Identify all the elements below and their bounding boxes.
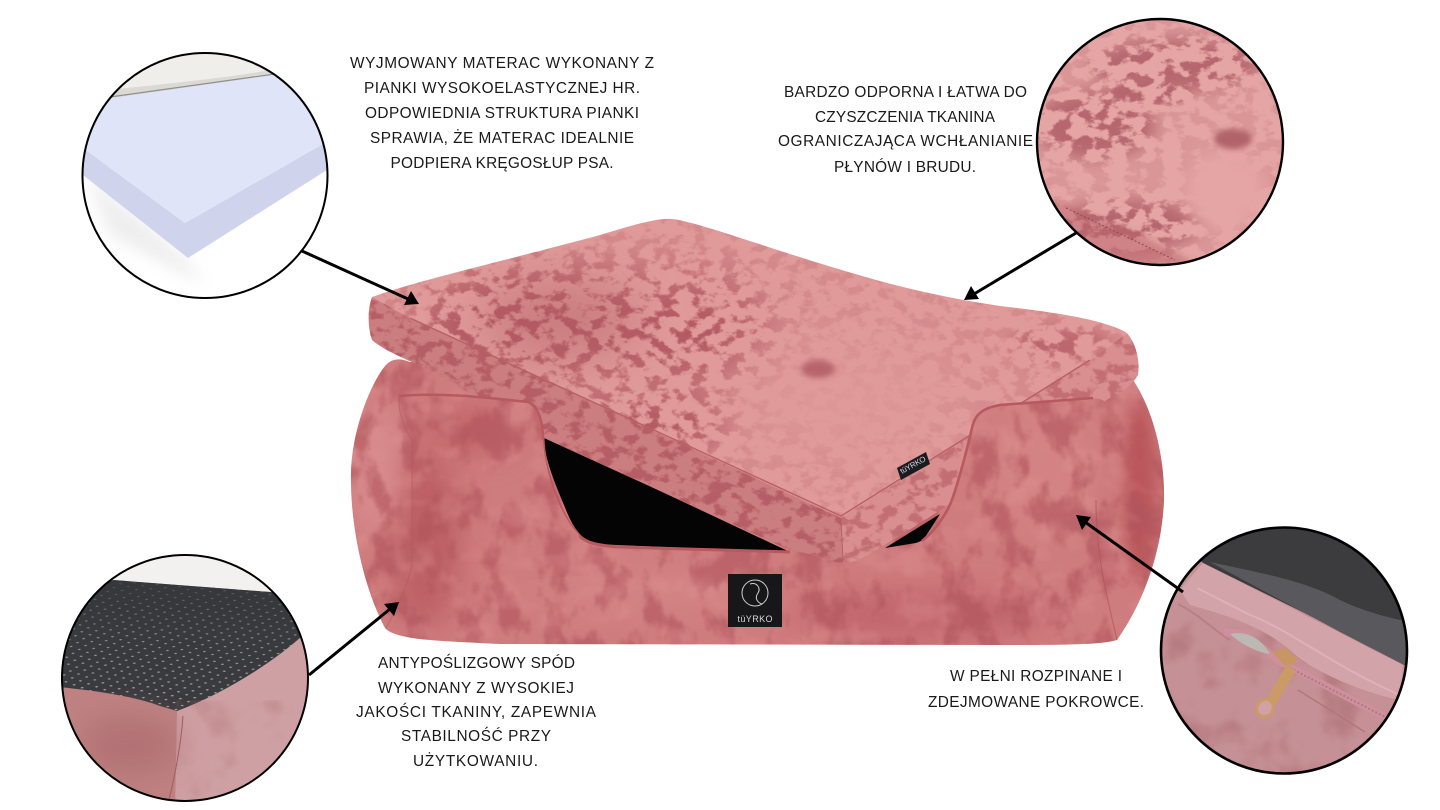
arrow: to underside (309, 602, 399, 675)
text: durable easy-clean fabric: PŁYNÓW I BRUDU. (834, 159, 976, 176)
arrow: to mattress (302, 251, 419, 305)
callout circle: zipper detail (1155, 520, 1415, 780)
text: removable HR foam mattress: PIANKI WYSOKOELASTYCZNEJ HR. (364, 80, 640, 97)
text: durable easy-clean fabric (778, 84, 1033, 176)
text: anti-slip underside: STABILNOŚĆ PRZY (401, 727, 551, 745)
callout circle: anti-slip underside (61, 554, 309, 802)
zipper opening (1230, 633, 1270, 654)
slider and pull (1253, 648, 1298, 720)
text: anti-slip underside: UŻYTKOWANIU. (413, 752, 538, 770)
text: removable HR foam mattress: WYJMOWANY MATERAC WYKONANY Z (350, 55, 654, 72)
mattress top face (372, 218, 1127, 518)
text: removable covers (928, 668, 1144, 711)
text: removable HR foam mattress: SPRAWIA, ŻE MATERAC IDEALNIE (370, 129, 634, 147)
right front arm (915, 396, 1118, 640)
callout circle: stain resistant fabric (1036, 18, 1284, 266)
left front arm (386, 394, 579, 628)
text: removable HR foam mattress: ODPOWIEDNIA STRUKTURA PIANKI (365, 105, 639, 122)
text: anti-slip underside: ANTYPOŚLIZGOWY SPÓD (378, 654, 575, 672)
arrow: to fabric (964, 233, 1076, 300)
product: velvet dog bed with lifted mattress (340, 200, 1180, 650)
text: removable covers: W PEŁNI ROZPINANE I (950, 668, 1122, 685)
text: anti-slip underside: JAKOŚCI TKANINY, ZAPEWNIA (356, 703, 597, 721)
mattress label: tüYRKO (899, 454, 927, 476)
lifted mattress (368, 218, 1139, 562)
mattress left side (368, 297, 843, 562)
mattress right side (840, 330, 1140, 565)
text: durable easy-clean fabric: OGRANICZAJĄCA WCHŁANIANIE (778, 133, 1033, 150)
text: removable HR foam mattress: PODPIERA KRĘGOSŁUP PSA. (390, 155, 614, 172)
zipper teeth (1224, 632, 1385, 717)
bed front label: tüYRKO (738, 614, 772, 624)
bed body (340, 350, 1180, 650)
mattress label (897, 452, 930, 480)
dark interior (543, 436, 790, 552)
text: anti-slip underside: WYKONANY Z WYSOKIEJ (378, 680, 574, 697)
arrow: to zipper cover (1076, 515, 1183, 592)
text: removable HR foam mattress (350, 55, 654, 172)
callout circle: HR foam mattress (80, 50, 330, 298)
text: durable easy-clean fabric: BARDZO ODPORNA I ŁATWA DO (784, 84, 1027, 101)
text: anti-slip underside (356, 654, 597, 770)
text: removable covers: ZDEJMOWANE POKROWCE. (928, 694, 1144, 711)
bed front label (728, 574, 782, 627)
text: durable easy-clean fabric: CZYSZCZENIA TKANINA (815, 109, 996, 126)
